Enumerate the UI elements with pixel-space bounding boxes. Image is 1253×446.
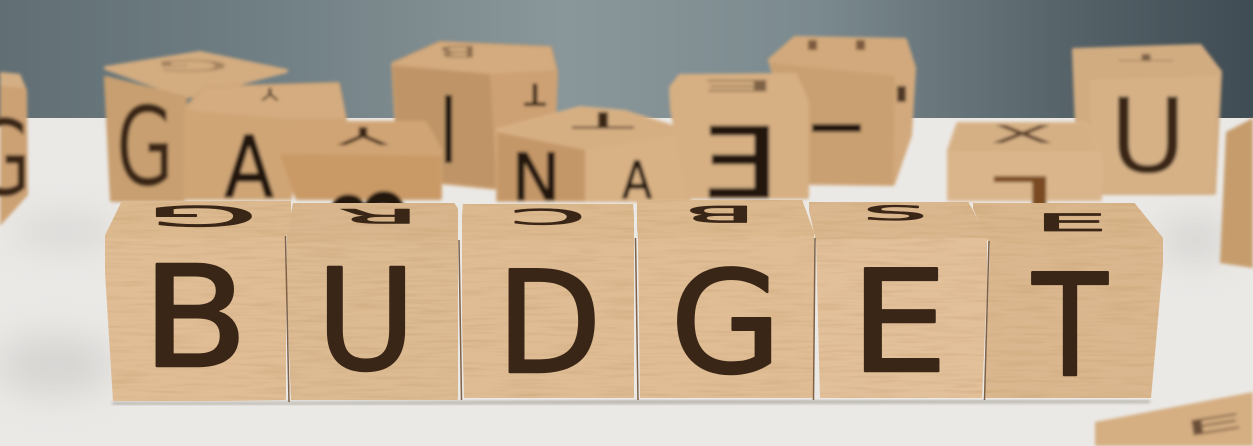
blurred background blocks: [0, 38, 1253, 268]
block: letter Y: B: [310, 184, 430, 260]
block: letter N: A: [622, 150, 652, 211]
block: letter I: [392, 42, 556, 188]
block: letter N: T: [571, 107, 635, 132]
block: letter U: U: [1109, 76, 1187, 197]
letter B top: G: [146, 199, 258, 232]
block: letter G: G: [153, 56, 231, 75]
block: letter I: T: [524, 77, 546, 110]
letter E front: E: [850, 240, 948, 404]
block: bottom right foreground: [1095, 392, 1253, 446]
gaps between blocks: [286, 236, 989, 402]
block: letter X: [949, 120, 1100, 225]
block: letter X: X: [989, 120, 1055, 149]
block: letter E: E: [700, 76, 778, 95]
block: letter G: G: [116, 84, 174, 212]
block: right edge: [1220, 118, 1253, 268]
block: letter I: B: [437, 42, 479, 61]
background: grey wall: [0, 0, 1253, 120]
block: letter U: T: [1117, 52, 1175, 63]
letter U top: R: [339, 204, 419, 227]
block: letter X: L: [994, 164, 1055, 225]
contact shadow under the word: [112, 400, 1150, 405]
letter D front: D: [496, 241, 602, 405]
letter G top: B: [684, 201, 756, 227]
block: letter A: A: [224, 118, 274, 218]
block: letter U: [1074, 46, 1220, 197]
block: letter N: N: [511, 140, 561, 216]
block: letter E: [671, 75, 807, 221]
word: BUDGET blocks: [105, 199, 1163, 409]
letter U front: U: [316, 239, 416, 402]
block U: [287, 203, 458, 402]
letter D top: C: [510, 204, 586, 229]
letter T top: E: [1034, 209, 1108, 237]
letter G front: G: [670, 241, 782, 406]
block: letter Y: Y: [336, 121, 390, 150]
block: letter G: [106, 53, 286, 212]
block G: [637, 200, 814, 406]
block: letter Y: [279, 121, 441, 260]
block: letter E: E: [702, 109, 780, 221]
block: letter N: [497, 107, 689, 216]
block: letter A: [185, 84, 345, 218]
block B: [105, 199, 291, 401]
letter E top: S: [863, 202, 927, 225]
block: bottom right foreground: E: [1181, 408, 1246, 442]
block: letter A: Y: [261, 84, 280, 104]
block D: [462, 204, 634, 405]
letter T front: T: [1032, 245, 1109, 409]
block E: [809, 202, 987, 404]
table shadows: [0, 218, 1230, 395]
background: white table: [0, 118, 1253, 446]
letter B front: B: [142, 236, 248, 399]
block: back centre: [770, 38, 914, 185]
block T: [973, 203, 1163, 409]
